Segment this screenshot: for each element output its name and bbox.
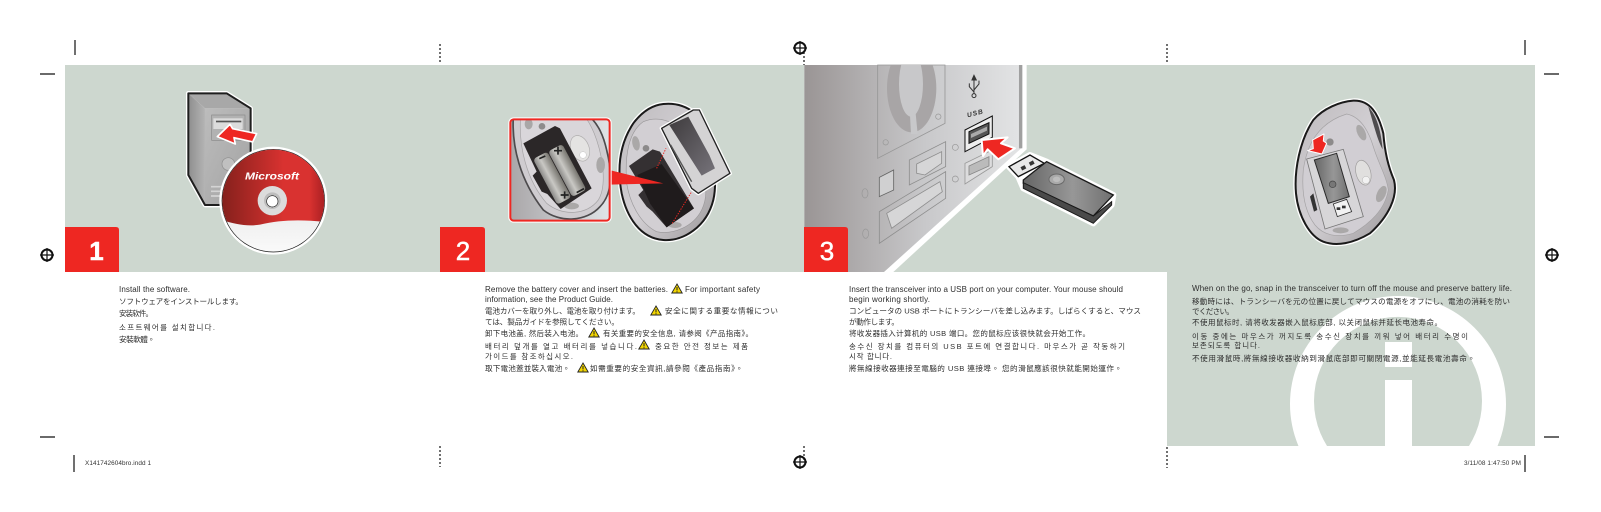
badge: step 3 (804, 227, 848, 272)
text block: step 2: Remove the battery cover and insert the batteries. (485, 285, 668, 294)
icon: left battery (533, 152, 571, 205)
text block: step 2: 有关重要的安全信息, 请参阅《产品指南》。 (603, 328, 753, 338)
panel: lower right green block with info icon (1167, 272, 1535, 446)
text block: step 3: 시작 합니다. (849, 351, 892, 361)
icon: info symbol (1290, 296, 1506, 446)
badge: step 1 (65, 227, 119, 272)
text block: step 4: 이동 중에는 마우스가 꺼지도록 송수신 장치를 끼워 넣어 배터리 수명이 (1192, 331, 1468, 341)
text block: step 4: 不使用滑鼠時,將無線接收器收納到滑鼠底部即可關閉電源,並能延長電池壽命。 (1192, 353, 1475, 363)
text block: step 2: 배터리 덮개를 열고 배터리를 넣습니다. (485, 341, 637, 351)
icon: USB transceiver (1009, 155, 1113, 223)
badge: step 1: 1 (89, 236, 104, 266)
icon: mouse body (1296, 101, 1395, 244)
illustration: step 2 mouse battery (509, 104, 730, 240)
text block: step 3: 將無線接收器連接至電腦的 USB 連接埠。 您的滑鼠應該很快就能開始運作。 (849, 363, 1122, 373)
text block: step 4: 移動時には、トランシーバを元の位置に戻してマウスの電源をオフにし、電池の消耗を防い (1192, 296, 1510, 306)
registration mark: right (1545, 248, 1559, 262)
registration mark: bottom (793, 455, 807, 469)
badge: step 2: 2 (456, 236, 470, 266)
inset: batteries close-up (509, 117, 611, 222)
text block: step 1: Install the software. (119, 285, 190, 294)
print slug: date: 3/11/08 1:47:50 PM (1464, 460, 1521, 467)
registration mark: left (40, 248, 54, 262)
text block: step 3: 将收发器插入计算机的 USB 端口。您的鼠标应该很快就会开始工作。 (849, 328, 1090, 338)
badge: step 3: 3 (820, 236, 834, 266)
text block: step 3: Insert the transceiver into a USB port on your computer. Your mouse should (849, 285, 1123, 294)
text block: step 2: 取下電池蓋並裝入電池。 (485, 363, 570, 373)
text block: step 2: 電池カバーを取り外し、電池を取り付けます。 (485, 306, 640, 316)
badge: step 2 (440, 227, 485, 272)
icon: Microsoft CD (219, 147, 327, 255)
text block: step 1: 소프트웨어를 설치합니다. (119, 322, 215, 332)
panel: computer back plate (804, 44, 1027, 272)
text block: step 4: でください。 (1192, 307, 1234, 316)
text block: step 2: ては、製品ガイドを参照してください。 (485, 316, 619, 326)
text block: step 2: 가이드를 참조하십시오. (485, 351, 573, 361)
text block: step 1: 安裝軟體。 (119, 334, 155, 344)
arrow: insert into port (982, 137, 1015, 159)
text block: step 2: For important safety (685, 285, 760, 294)
text block: step 2 (485, 284, 778, 373)
icon: battery cover (662, 110, 730, 193)
text block: step 1: ソフトウェアをインストールします。 (119, 297, 243, 306)
icon: second USB port (965, 150, 992, 184)
text block: step 4: 不使用鼠标时, 请将收发器嵌入鼠标底部, 以关闭鼠标并延长电池寿命。 (1192, 317, 1442, 327)
arrow: zoom wedge (609, 170, 663, 185)
text block: step 2: 如需重要的安全資訊,請參閱《產品指南》。 (590, 363, 743, 373)
illustration: step 4 mouse underside (1296, 101, 1395, 244)
panel: top green band (65, 65, 1535, 272)
text block: step 4: 보존되도록 합니다. (1192, 341, 1260, 350)
text block: step 3: begin working shortly. (849, 295, 930, 304)
text block: step 2: information, see the Product Guide. (485, 295, 613, 304)
text block: step 4: When on the go, snap in the transceiver to turn off the mouse and preserve battery life. (1192, 284, 1512, 293)
text block: step 3: が動作します。 (849, 316, 899, 326)
icon: right battery (548, 144, 586, 197)
text block: step 3 (849, 285, 1141, 373)
text block: step 2: 安全に関する重要な情報につい (665, 306, 778, 316)
illustration: step 1 computer and CD (188, 93, 327, 255)
text block: step 4 (1192, 284, 1512, 363)
arrow: insert disc (217, 124, 257, 144)
icon: active USB port (965, 116, 992, 152)
text block: step 2: 卸下电池盖, 然后装入电池。 (485, 328, 583, 338)
icon: USB symbol (969, 75, 979, 98)
icon: computer tower (188, 93, 251, 205)
text block: step 2: 중요한 안전 정보는 제품 (655, 341, 748, 351)
illustration: step 3 USB port (804, 44, 1113, 272)
icon: warning triangle (578, 284, 682, 372)
icon: stored transceiver (1314, 153, 1352, 217)
icon: Microsoft CD: Microsoft (245, 171, 300, 182)
print slug: file name: X141742604bro.indd 1 (85, 460, 151, 467)
text block: step 3: 송수신 장치를 컴퓨터의 USB 포트에 연결합니다. 마우스가 곧 작동하기 (849, 341, 1125, 351)
registration mark: top (793, 41, 807, 55)
text block: step 1 (119, 285, 243, 344)
icon: open mouse with cover (619, 104, 715, 240)
label: USB: USB (966, 109, 984, 119)
text block: step 3: コンピュータの USB ポートにトランシーバを差し込みます。しばらくすると、マウス (849, 306, 1141, 316)
text block: step 1: 安装软件。 (119, 308, 153, 318)
arrow: snap in transceiver (1308, 134, 1327, 154)
